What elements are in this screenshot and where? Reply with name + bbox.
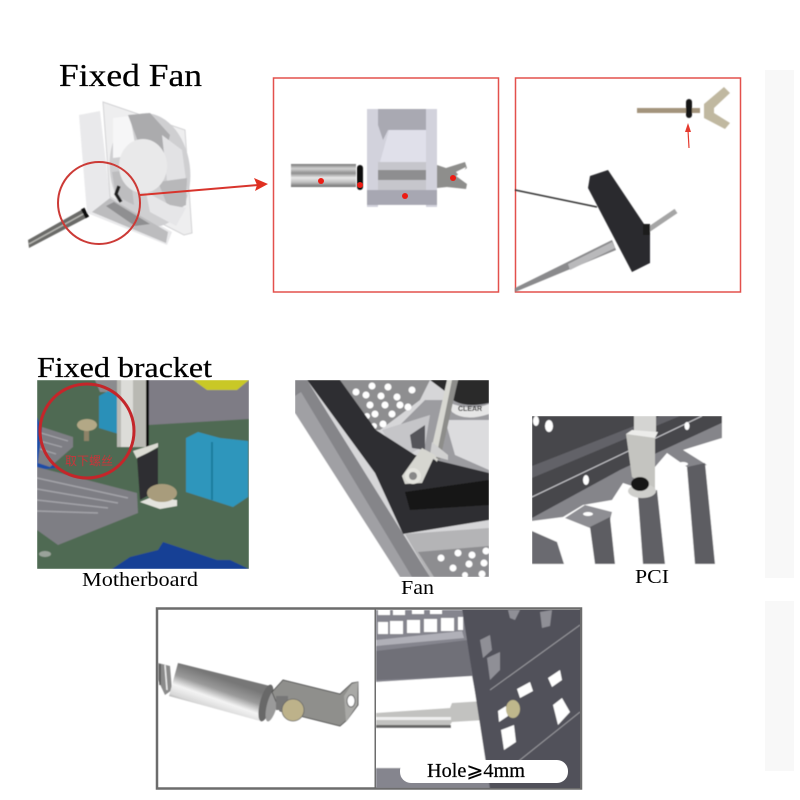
- dark fan frame: [307, 380, 489, 534]
- wing nut: [704, 87, 730, 129]
- red circle: [40, 384, 134, 478]
- wing nut: [437, 162, 467, 189]
- hole size label: [400, 760, 568, 783]
- caption: Fan: Fan: [401, 577, 434, 599]
- rod: [515, 240, 616, 292]
- bottom grill: [405, 528, 489, 577]
- white slots row: [378, 610, 463, 634]
- panel: installation details: [157, 608, 581, 789]
- right detail: case interior: [376, 610, 580, 788]
- removed screw: [84, 428, 89, 441]
- case wall: [148, 380, 249, 425]
- dark slot bar: [532, 416, 722, 518]
- wire clip: [116, 186, 121, 202]
- rod: [376, 701, 486, 728]
- panel: motherboard photo: [37, 380, 249, 569]
- chassis rail: [295, 380, 430, 577]
- bracket: [117, 380, 147, 447]
- red markers: [318, 175, 456, 199]
- fan hub: [119, 139, 167, 193]
- washer and screw: [628, 484, 656, 498]
- slot strips: [590, 517, 615, 564]
- title: Fixed bracket: Fixed bracket: [37, 353, 212, 384]
- arrow to detail: [140, 178, 268, 195]
- grill background: [295, 380, 489, 577]
- cut corner: [295, 413, 400, 577]
- fan lower inside: [92, 198, 168, 243]
- panel: PCI bracket photo: [532, 416, 723, 565]
- fan hub label: CLEAR: [458, 406, 482, 413]
- L bracket: [272, 680, 358, 726]
- caption: PCI: PCI: [635, 566, 669, 588]
- fan blades: [400, 400, 489, 480]
- panel: exploded view: [274, 78, 498, 292]
- fan frame side view: [367, 109, 437, 207]
- hex holes: [352, 382, 416, 429]
- fan front frame: [103, 102, 192, 235]
- red arrow: [685, 123, 691, 148]
- hole size label: Hole⩾4mm: [427, 760, 525, 782]
- bolt: [637, 108, 700, 113]
- left detail: standoff and bracket: [158, 663, 358, 726]
- perforated side panel: [462, 608, 581, 789]
- mounting screw: [506, 700, 520, 718]
- fan opening: [102, 108, 198, 232]
- screwdriver: [430, 380, 458, 462]
- fan blades: [112, 113, 188, 226]
- white opening: [376, 676, 490, 768]
- rod and bracket: [634, 416, 656, 434]
- screw: [648, 211, 676, 230]
- yellow part: [193, 380, 249, 390]
- fan back plate: [79, 111, 172, 245]
- washers: [255, 683, 277, 723]
- magnifier circle: [58, 162, 140, 244]
- panel: photo of mount: [515, 78, 740, 292]
- rod: [28, 209, 88, 248]
- holes: [533, 416, 539, 426]
- cylinder: [291, 164, 356, 187]
- cable: [515, 190, 597, 207]
- heat sinks: [37, 467, 138, 545]
- mounted screw: [140, 497, 177, 509]
- red note: 取下螺丝: [65, 454, 113, 468]
- dark blue parts: [37, 417, 56, 470]
- divider: [374, 609, 376, 788]
- o-ring: [357, 165, 363, 190]
- bolt o-ring: [686, 99, 692, 118]
- panel: fan mounting photo: [295, 380, 489, 577]
- fan illustration: [28, 102, 198, 248]
- metal flange: [532, 423, 722, 521]
- side panel strips: [765, 70, 794, 771]
- threaded screw and nut: [276, 696, 288, 710]
- black clamp block: [588, 170, 650, 272]
- blue capacitors: [99, 391, 132, 438]
- title: Fixed Fan: Fixed Fan: [59, 57, 202, 93]
- fan hub label: [430, 380, 489, 418]
- lug: [402, 448, 435, 484]
- caption: Motherboard: Motherboard: [82, 569, 198, 591]
